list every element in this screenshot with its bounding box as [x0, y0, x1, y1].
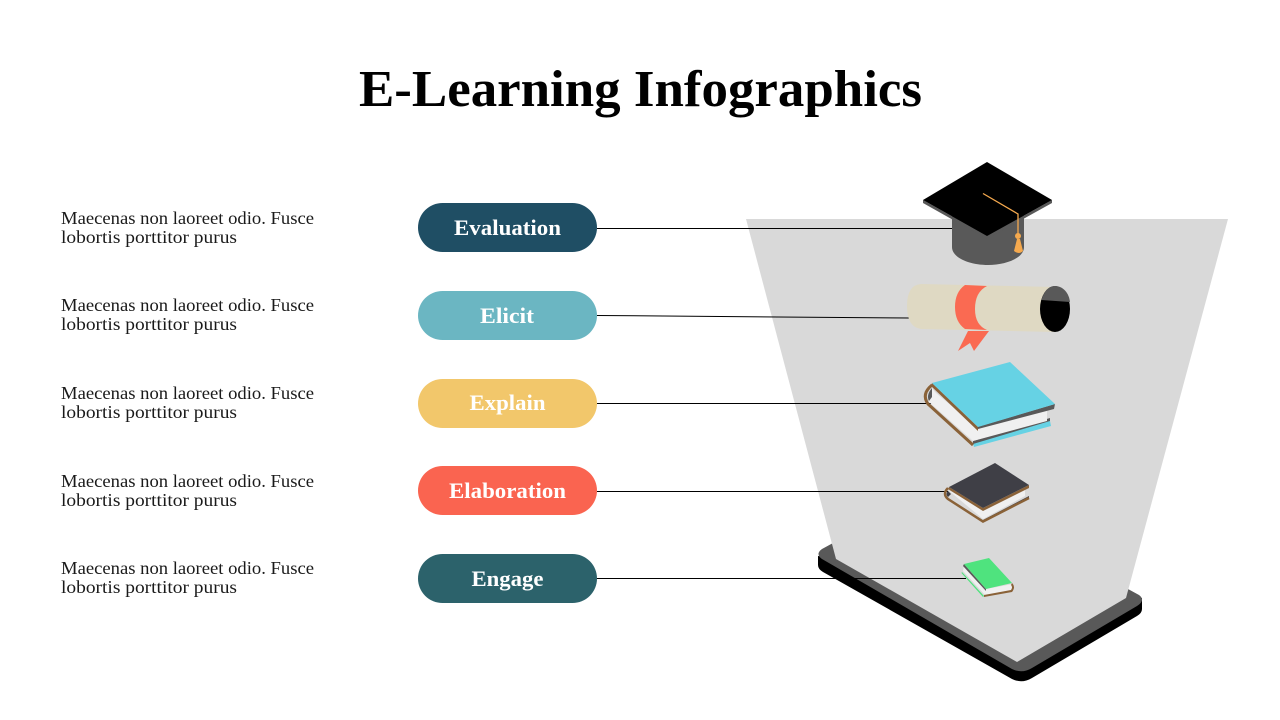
- description: Engage: Maecenas non laoreet odio. Fusce: [61, 558, 314, 578]
- description: Engage: [61, 558, 314, 597]
- pill label: Explain: Explain: [470, 390, 546, 415]
- row: Engage: [61, 554, 597, 603]
- pill label: Elicit: Elicit: [480, 303, 535, 328]
- connector lines: [597, 228, 966, 578]
- description: Elicit: Maecenas non laoreet odio. Fusce: [61, 295, 314, 315]
- title: E-Learning Infographics: [359, 61, 922, 118]
- icon: large blue book: [925, 362, 1055, 447]
- pill label: Engage: Engage: [472, 566, 544, 591]
- description: Evaluation: lobortis porttitor purus: [61, 227, 237, 247]
- description: Engage: lobortis porttitor purus: [61, 577, 237, 597]
- pill label: Elaboration: Elaboration: [449, 478, 566, 503]
- pill label: Evaluation: Evaluation: [454, 215, 561, 240]
- icon: diploma scroll: [907, 284, 1070, 351]
- description: Elaboration: Maecenas non laoreet odio. Fusce: [61, 471, 314, 491]
- description: Explain: lobortis porttitor purus: [61, 402, 237, 422]
- pill: Elaboration: [418, 466, 597, 515]
- platform base: [818, 543, 1142, 681]
- pill: Engage: [418, 554, 597, 603]
- description: Elicit: lobortis porttitor purus: [61, 314, 237, 334]
- icon: small dark book: [945, 463, 1029, 522]
- row: Elaboration: [61, 466, 597, 515]
- pill: Elicit: [418, 291, 597, 340]
- light beam: [746, 219, 1228, 662]
- row: Elicit: [61, 291, 597, 340]
- description: Elaboration: lobortis porttitor purus: [61, 490, 237, 510]
- pill: Evaluation: [418, 203, 597, 252]
- icon: small green book: [962, 558, 1014, 597]
- description: Elicit: [61, 295, 314, 334]
- description: Evaluation: [61, 208, 314, 247]
- pill: Explain: [418, 379, 597, 428]
- description: Evaluation: Maecenas non laoreet odio. Fusce: [61, 208, 314, 228]
- icon: graduation cap: [923, 162, 1052, 265]
- row: Explain: [61, 379, 597, 428]
- description: Elaboration: [61, 471, 314, 510]
- row: Evaluation: [61, 203, 597, 252]
- description: Explain: Maecenas non laoreet odio. Fusce: [61, 383, 314, 403]
- description: Explain: [61, 383, 314, 422]
